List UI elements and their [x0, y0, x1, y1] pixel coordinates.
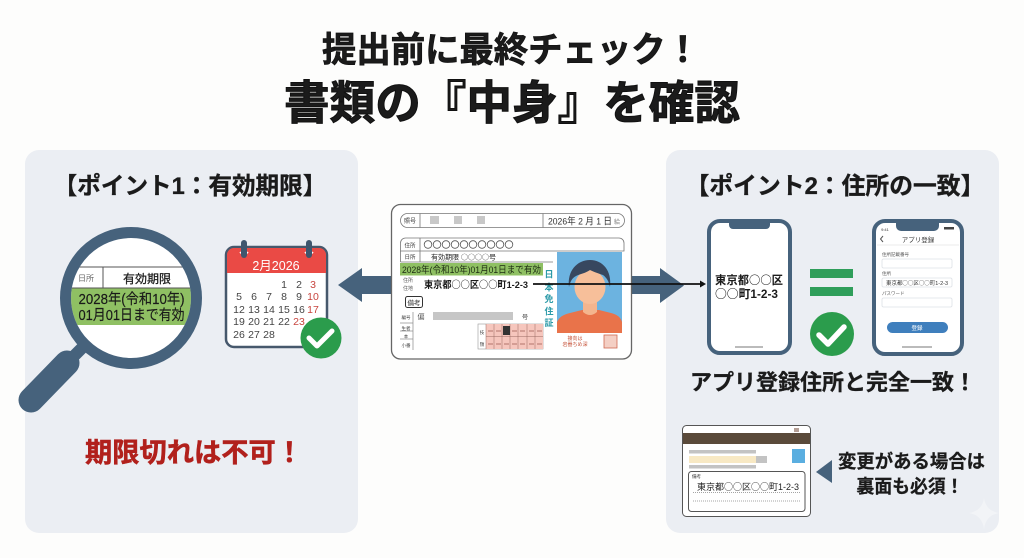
note: back side required: 変更がある場合は	[838, 451, 985, 472]
icon: calendar: 21	[263, 316, 275, 328]
phone: address display: ○○町1-2-3	[715, 285, 778, 302]
card vertical teal label: 住	[544, 306, 554, 316]
card pink table: 技	[480, 329, 485, 336]
icon: calendar: 13	[248, 304, 260, 316]
warning: expired not accepted: 期限切れは不可！	[85, 438, 303, 468]
card lower fields: 生者	[402, 325, 411, 332]
card vertical teal label: 証	[544, 318, 554, 328]
card address rows	[400, 238, 624, 262]
heading: point 1: 【ポイント1：有効期限】	[54, 173, 326, 200]
icon: calendar: 22	[278, 316, 290, 328]
card vertical teal label: 本	[544, 282, 554, 292]
card photo	[557, 252, 622, 333]
icon: calendar: 23	[293, 316, 305, 328]
icon: calendar: 17	[307, 304, 319, 316]
icon: calendar: 9	[296, 291, 302, 303]
icon: calendar: 10	[307, 291, 319, 303]
icon: calendar: 14	[263, 304, 275, 316]
phone: app registration form	[874, 221, 962, 354]
phone: app registration form: 9:41	[881, 227, 890, 232]
phone: app registration form: 住所記載番号	[882, 251, 909, 258]
icon: magnifying glass: 日所	[78, 273, 94, 283]
icon: calendar: 15	[278, 304, 290, 316]
card address line: 東京都○○区○○町1-2-3	[424, 277, 528, 291]
card footer red text and stamp: 岩器ちめ深	[562, 341, 588, 348]
icon: magnifying glass: 2028年(令和10年)	[78, 291, 184, 308]
icon: calendar: 5	[236, 291, 242, 303]
icon: equals sign	[810, 269, 853, 296]
icon: sparkle watermark	[969, 498, 999, 529]
icon: magnifying glass: 有効期限	[123, 272, 171, 286]
card remarks badge: 備考	[408, 298, 421, 307]
icon: calendar: 20	[248, 316, 260, 328]
icon: magnifying glass: 01月01日まで有効	[78, 307, 184, 324]
icon: calendar: 28	[263, 329, 275, 341]
card top row: 給	[614, 218, 620, 226]
note: back side required	[838, 451, 985, 497]
icon: calendar: 2	[296, 279, 302, 291]
callout line: card address to phone	[533, 280, 706, 288]
icon: calendar: 16	[293, 304, 305, 316]
card vertical teal label	[544, 270, 554, 328]
card back: 備考	[692, 473, 701, 480]
card pink table: 類	[480, 341, 485, 348]
card address rows: 住所	[404, 242, 416, 250]
card vertical teal label: 免	[544, 293, 554, 304]
card lower fields: 編号	[402, 314, 411, 321]
card back	[682, 426, 810, 516]
card footer red text and stamp: 接向は	[567, 335, 583, 342]
note: back side required: 裏面も必須！	[856, 476, 964, 497]
card lower fields: 小番	[402, 342, 411, 349]
title: 提出前に最終チェック！	[322, 31, 700, 70]
icon: green check	[810, 312, 854, 356]
card pink table	[478, 324, 543, 349]
phone: app registration form: アプリ登録	[902, 235, 935, 244]
panel: point 1 expiry date	[25, 150, 358, 533]
panel: point 2 address match	[666, 150, 999, 533]
card back: 東京都○○区○○町1-2-3	[697, 479, 799, 493]
card address rows: 有効期限 ○○○○号	[431, 252, 496, 262]
icon: calendar: 19	[233, 316, 245, 328]
icon: calendar	[226, 243, 327, 347]
card address line: 住地	[403, 285, 413, 292]
title: 書類の『中身』を確認	[284, 77, 740, 129]
title	[284, 31, 740, 129]
icon: magnifying glass	[31, 232, 200, 400]
card validity highlight: 2028年(令和10年)01月01日まで有効	[402, 264, 541, 276]
arrow: pointing to card back	[816, 460, 832, 483]
card lower fields: 偏	[418, 312, 424, 321]
card address line: 住所	[403, 277, 413, 284]
card vertical teal label: 日	[544, 270, 554, 280]
license card	[392, 204, 632, 359]
icon: calendar: 6	[251, 291, 257, 303]
caption: full match with app address: アプリ登録住所と完全一致！	[690, 370, 976, 395]
phone: address display	[709, 221, 790, 353]
icon: calendar: 3	[310, 279, 316, 291]
card lower fields: 号	[522, 313, 529, 321]
card top row: 照号	[404, 218, 416, 225]
phone: app registration form: 東京都○○区○○町1-2-3	[886, 278, 948, 287]
card lower fields: 本	[404, 333, 409, 340]
card top row: 2026年 2 月 1 日	[548, 216, 612, 228]
icon: calendar: 26	[233, 329, 245, 341]
phone: app registration form: 住所	[882, 270, 891, 277]
icon: calendar: 2月2026	[252, 259, 300, 273]
icon: calendar: 8	[281, 291, 287, 303]
card address rows: 日所	[404, 253, 416, 261]
card lower fields	[400, 312, 529, 350]
card remarks badge	[406, 296, 422, 308]
icon: calendar: 27	[248, 329, 260, 341]
icon: calendar: 7	[266, 291, 272, 303]
arrow: right to point 2	[630, 268, 684, 303]
icon: green check on calendar	[300, 318, 342, 358]
card footer red text and stamp	[562, 335, 617, 348]
arrow: left to point 1	[338, 268, 392, 302]
heading: point 2: 【ポイント2：住所の一致】	[686, 173, 984, 200]
phone: app registration form: 登録	[911, 324, 923, 332]
phone: app registration form: パスワード	[882, 291, 904, 296]
phone: address display: 東京都○○区	[715, 272, 783, 288]
card top row	[400, 214, 624, 228]
icon: calendar: 12	[233, 304, 245, 316]
icon: calendar: 1	[281, 279, 287, 291]
